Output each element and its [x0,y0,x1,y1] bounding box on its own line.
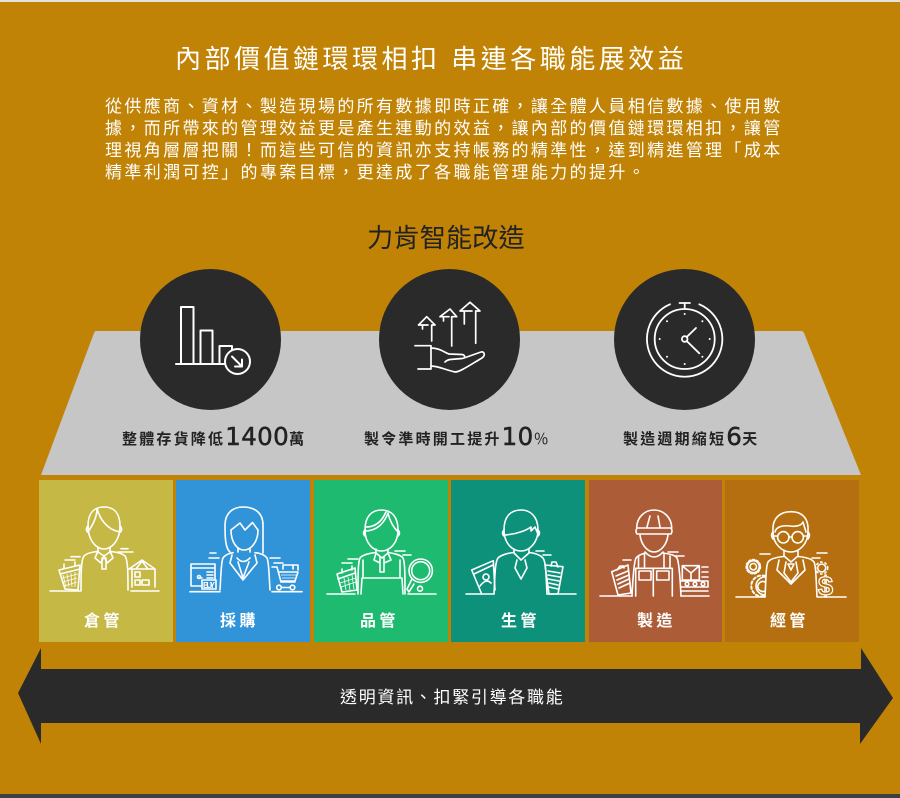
tile: warehouse [39,480,173,642]
icon: stopwatch [614,269,755,410]
stat: cycle time: 製造週期縮短6天 [623,422,759,451]
intro text block: 據，而所帶來的管理效益更是產生連動的效益，讓內部的價值鏈環環相扣，讓管 [105,118,783,138]
double-headed arrow banner [18,648,893,744]
tile: management: 經管 [770,612,809,630]
tile: purchasing: 採購 [220,612,259,630]
tiny buy label: BUY [203,581,216,590]
icon: hand with rising arrows [379,269,520,410]
stat: work orders: 製令準時開工提升10％ [364,422,549,451]
bottom strip [0,794,900,798]
tile: manufacturing: 製造 [637,612,676,630]
intro text block [105,96,783,182]
icon: inventory reduction [140,269,281,410]
title: 內部價值鏈環環相扣 串連各職能展效益 [175,44,687,74]
tile: management [725,480,859,642]
dollar sign: $ [818,571,833,601]
stat: inventory: 整體存貨降低1400萬 [122,422,306,451]
intro text block: 理視角層層把關！而這些可信的資訊亦支持帳務的精準性，達到精進管理「成本 [105,140,783,160]
double-headed arrow banner: 透明資訊、扣緊引導各職能 [340,688,564,707]
tile: quality control [314,480,448,642]
top strip [0,0,900,2]
tile: warehouse: 倉管 [84,612,123,630]
tile: production control [451,480,585,642]
intro text block: 精準利潤可控」的專案目標，更達成了各職能管理能力的提升。 [105,162,647,182]
tile: production control: 生管 [501,612,540,630]
tile: manufacturing [589,480,722,642]
subtitle: 力肯智能改造 [367,223,525,253]
tile: quality control: 品管 [360,612,399,630]
intro text block: 從供應商、資材、製造現場的所有數據即時正確，讓全體人員相信數據、使用數 [105,96,783,116]
tile: purchasing [176,480,310,642]
